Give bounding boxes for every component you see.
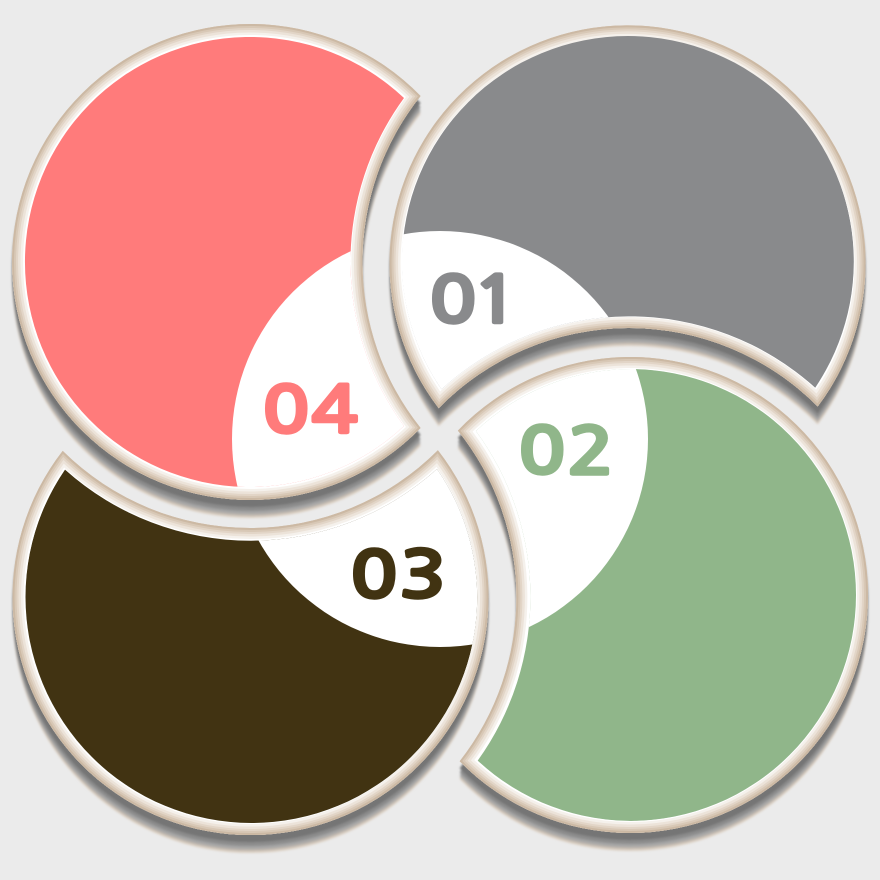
number 02: 02 xyxy=(518,419,615,484)
panel: 02 green segment xyxy=(457,357,870,852)
number 03: 03 xyxy=(350,543,447,608)
number 04: 04 xyxy=(262,378,359,443)
panel: 03 brown segment xyxy=(11,450,490,854)
panel: 04 pink segment xyxy=(10,24,422,519)
number 01: 01 xyxy=(429,268,520,333)
panel: 01 gray segment xyxy=(388,25,867,426)
